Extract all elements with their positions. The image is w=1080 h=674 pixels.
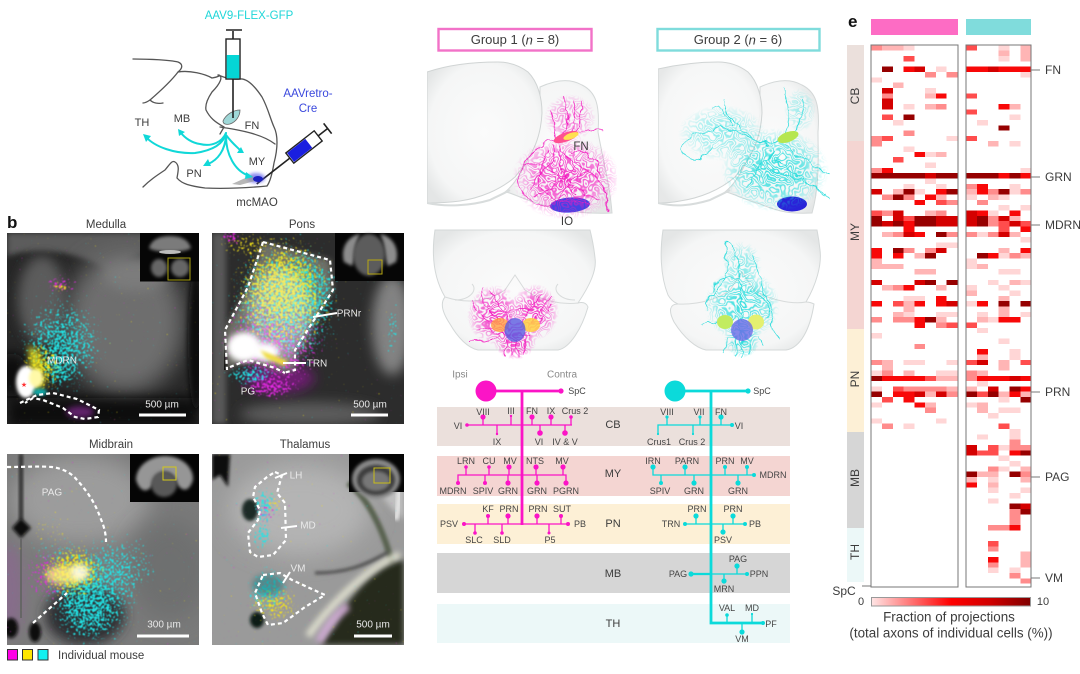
- panel: Thalamus micrograph: [212, 439, 404, 645]
- CB branches group 1: FN: [526, 406, 538, 416]
- panel c: group 1 heading: Group 1 (n = 8): [471, 32, 559, 47]
- heatmap callouts: VM: [1045, 571, 1063, 585]
- MY branches group 2: [645, 456, 786, 496]
- TH branches group 2: VM: [735, 634, 749, 644]
- CB branches group 1: [454, 406, 588, 447]
- region labels: PN: [186, 168, 202, 180]
- panel: Medulla micrograph: [0, 219, 204, 428]
- heatmap callouts: PRN: [1045, 385, 1070, 399]
- heatmap: group 2: [966, 45, 1031, 584]
- icon: mcMAO injection blob: [232, 173, 265, 185]
- colour bar caption: Fraction of projections: [883, 610, 1015, 624]
- heatmap callouts: PAG: [1045, 470, 1069, 484]
- band labels: MY: [605, 468, 622, 480]
- MB branches group 2: PAG: [729, 554, 747, 564]
- traces: [518, 98, 610, 212]
- colour bar: [858, 596, 1049, 608]
- glass shell: [661, 230, 820, 350]
- tracer tangle: [695, 235, 790, 360]
- region strip: CB: [848, 88, 862, 104]
- panel: Midbrain micrograph: [7, 439, 199, 645]
- heading: Thalamus: Thalamus: [280, 439, 330, 451]
- MY branches group 2: MDRN: [760, 470, 786, 480]
- MY branches group 1: MDRN: [440, 486, 466, 496]
- outline: dashed region: [20, 393, 99, 419]
- MY branches group 1: GRN: [527, 486, 547, 496]
- heatmap callouts: [832, 63, 1080, 598]
- PN branches group 2: PRN: [723, 504, 743, 514]
- PN branches group 2: PSV: [714, 535, 732, 545]
- PN branches group 1: SLD: [493, 535, 511, 545]
- PN branches group 1: SLC: [465, 535, 483, 545]
- heading: Midbrain: Midbrain: [89, 439, 133, 451]
- arrows: projections: [143, 129, 253, 179]
- MY branches group 1: MV: [555, 456, 569, 466]
- PN branches group 1: KF: [482, 504, 494, 514]
- CB branches group 2: VI: [735, 421, 743, 431]
- image: medulla section: [0, 233, 204, 428]
- scale bar: 500 µm: [354, 620, 392, 638]
- label: PAG: PAG: [42, 488, 62, 498]
- label: IO: IO: [561, 216, 573, 228]
- heatmap callouts: SpC: [832, 584, 856, 598]
- CB branches group 2: Crus 2: [679, 437, 705, 447]
- callout: MD: MD: [300, 520, 316, 532]
- colour bar: 0: [858, 596, 864, 608]
- region labels: mcMAO: [236, 197, 278, 209]
- heading: Pons: Pons: [289, 219, 315, 231]
- FN nucleus: [554, 130, 579, 144]
- scale bar: 500 µm: 500 µm: [353, 400, 387, 410]
- soma and trunk: [664, 380, 771, 623]
- side labels: Ipsi and Contra: Ipsi: [452, 370, 468, 380]
- label: AAVretro-Cre: Cre: [299, 103, 317, 115]
- MB branches group 2: MRN: [714, 584, 734, 594]
- IO nucleus: [550, 197, 590, 213]
- colour bar: 10: [1037, 596, 1049, 608]
- tracer tangle: [510, 94, 620, 220]
- MY branches group 1: NTS: [526, 456, 544, 466]
- callout: LH: LH: [290, 470, 302, 482]
- PN branches group 2: [662, 504, 761, 545]
- region strip: MB: [848, 469, 862, 487]
- region strip: TH: [848, 544, 862, 560]
- colour bar caption: [849, 610, 1053, 640]
- MY branches group 1: [440, 456, 579, 496]
- tracer tangle: [465, 283, 559, 361]
- CB branches group 1: Crus 2: [562, 406, 588, 416]
- label: AAVretro-Cre: [283, 88, 333, 115]
- CB branches group 2: [647, 407, 743, 447]
- PN branches group 1: PB: [574, 519, 586, 529]
- legend: individual mouse: Individual mouse: [58, 650, 144, 662]
- icon: FN injection site: [223, 110, 240, 124]
- label: AAVretro-Cre: AAVretro-: [283, 88, 333, 100]
- legend: individual mouse: [8, 650, 144, 662]
- panel label b: b: [7, 213, 17, 232]
- inset: coronal section: [130, 454, 199, 502]
- image: pons section: [212, 225, 412, 426]
- PN branches group 1: SUT: [553, 504, 572, 514]
- colour bar caption: (total axons of individual cells (%)): [849, 626, 1053, 640]
- inset: coronal section: [349, 454, 404, 499]
- PN branches group 1: PRN: [528, 504, 548, 514]
- MY branches group 2: MV: [740, 456, 754, 466]
- glass cerebrum: [427, 62, 542, 203]
- icon: blue syringe: [253, 123, 332, 189]
- TH branches group 2: MD: [745, 603, 759, 613]
- MY branches group 2: SPIV: [650, 486, 670, 496]
- TH branches group 2: [719, 603, 777, 644]
- soma and trunk: SpC: [753, 386, 771, 396]
- callout: VM: [283, 564, 306, 583]
- PN branches group 2: PB: [749, 519, 761, 529]
- traces: [700, 240, 780, 358]
- panel a: injection schematic: [133, 10, 333, 209]
- IO nuclei: [731, 319, 753, 341]
- glass shell: [433, 230, 595, 350]
- region labels: [135, 113, 278, 209]
- FN nuclei: [717, 314, 764, 330]
- label: PG: PG: [241, 386, 255, 398]
- callout: PRNr: [313, 308, 362, 320]
- image: midbrain section: [7, 454, 199, 645]
- CB branches group 1: VI: [535, 437, 543, 447]
- band labels: PN: [605, 518, 621, 530]
- region strip: MY: [848, 223, 862, 241]
- MY branches group 2: GRN: [728, 486, 748, 496]
- inset: coronal section: [335, 233, 404, 281]
- region labels: FN: [245, 120, 259, 132]
- PN branches group 1: PSV: [440, 519, 458, 529]
- panel: Pons micrograph: [212, 219, 412, 426]
- CB branches group 1: VIII: [476, 407, 490, 417]
- scale bar: 500 µm: [351, 400, 388, 416]
- callout: PRNr: PRNr: [337, 308, 362, 320]
- CB branches group 2: Crus1: [647, 437, 671, 447]
- outline: VM: [255, 573, 325, 625]
- CB branches group 2: FN: [715, 407, 727, 417]
- traces: [470, 288, 552, 358]
- PN branches group 1: P5: [544, 535, 556, 545]
- panel label e: e: [848, 12, 857, 31]
- outline: LH and MD: [248, 472, 286, 557]
- brain model: group 1 lateral view: [427, 62, 620, 220]
- brain model: group 2 lateral view: [658, 62, 835, 220]
- label: AAV9-FLEX-GFP: AAV9-FLEX-GFP: [205, 10, 294, 22]
- callout: LH: [275, 470, 302, 482]
- glass cerebrum: [658, 62, 762, 203]
- MY branches group 1: LRN: [457, 456, 475, 466]
- MY branches group 1: GRN: [498, 486, 518, 496]
- callout: TRN: TRN: [307, 358, 327, 370]
- MB branches group 2: PAG: [669, 569, 687, 579]
- heatmap callouts: FN: [1045, 63, 1061, 77]
- band labels: CB: [605, 419, 621, 431]
- side labels: Ipsi and Contra: Contra: [547, 370, 577, 380]
- heatmap callouts: MDRN: [1045, 218, 1080, 232]
- side labels: Ipsi and Contra: [452, 370, 577, 380]
- FN nucleus: [778, 131, 798, 143]
- region strip: PN: [848, 371, 862, 387]
- heatmap callouts: GRN: [1045, 170, 1072, 184]
- band labels: MB: [605, 568, 621, 580]
- PN branches group 2: TRN: [662, 519, 680, 529]
- band labels: TH: [606, 618, 620, 630]
- IO nuclei: [504, 318, 526, 342]
- TH branches group 2: VAL: [719, 603, 735, 613]
- MB branches group 2: [669, 554, 768, 594]
- PN branches group 1: [440, 504, 586, 545]
- PN branches group 2: PRN: [687, 504, 707, 514]
- brain outline: [133, 59, 277, 188]
- brain model: group 2 front view: [661, 230, 820, 360]
- CB branches group 2: VIII: [660, 407, 674, 417]
- dendrogram: group 2: [645, 380, 786, 644]
- brain model: group 1 front view: [433, 230, 595, 361]
- group colour bars: [871, 19, 1031, 35]
- CB branches group 1: IX: [493, 437, 501, 447]
- heading: Medulla: Medulla: [86, 219, 127, 231]
- callout: VM: VM: [290, 564, 306, 574]
- MB branches group 2: PPN: [750, 569, 768, 579]
- scale bar: 300 µm: [137, 620, 189, 638]
- TH branches group 2: PF: [765, 619, 777, 629]
- glass cerebellum and brainstem: [725, 81, 818, 213]
- tracer tangle: [680, 90, 828, 211]
- scale bar: 500 µm: [139, 400, 186, 416]
- region labels: MY: [249, 156, 266, 168]
- image: thalamus section: [212, 454, 404, 645]
- image: medulla section: ★: [21, 381, 27, 389]
- MY branches group 1: MV: [503, 456, 517, 466]
- glass cerebellum and brainstem: [505, 81, 612, 213]
- soma and trunk: [476, 380, 586, 525]
- CB branches group 1: VI: [454, 421, 462, 431]
- MY branches group 2: PARN: [675, 456, 699, 466]
- heatmap: group 1: [871, 45, 957, 429]
- label: MDRN: MDRN: [47, 356, 77, 366]
- region strip: [847, 45, 864, 582]
- heatmap frames: [871, 45, 1031, 587]
- CB branches group 1: III: [507, 406, 515, 416]
- CB branches group 2: VII: [693, 407, 705, 417]
- FN nuclei: [491, 318, 540, 332]
- MY branches group 2: GRN: [684, 486, 704, 496]
- traces: [681, 88, 830, 200]
- scale bar: 500 µm: 500 µm: [356, 620, 390, 630]
- label: FN group 1: FN: [573, 141, 589, 153]
- callout: TRN: [283, 358, 327, 370]
- MY branches group 2: PRN: [715, 456, 735, 466]
- IO nucleus: [777, 196, 807, 212]
- MY branches group 2: IRN: [645, 456, 661, 466]
- panel c: group 1 heading: [438, 29, 592, 50]
- MY branches group 1: SPIV: [473, 486, 493, 496]
- MY branches group 1: PGRN: [553, 486, 579, 496]
- region labels: TH: [135, 117, 149, 129]
- outline: PRNr and TRN: [225, 242, 333, 373]
- MY branches group 1: CU: [482, 456, 496, 466]
- panel c: group 2 heading: Group 2 (n = 6): [694, 32, 782, 47]
- callout: MD: [281, 520, 316, 532]
- scale bar: 300 µm: 300 µm: [147, 620, 181, 630]
- CB branches group 1: IV & V: [552, 437, 578, 447]
- dendrogram: group 1: [440, 380, 588, 545]
- CB branches group 1: IX: [547, 406, 555, 416]
- scale bar: 500 µm: 500 µm: [145, 400, 179, 410]
- bands: brain regions: [437, 407, 790, 643]
- band labels: [605, 419, 622, 630]
- soma and trunk: SpC: [568, 386, 586, 396]
- region labels: MB: [174, 113, 190, 125]
- icon: cyan syringe: [226, 30, 242, 118]
- PN branches group 1: PRN: [499, 504, 519, 514]
- inset: coronal section: [140, 233, 199, 282]
- outline: PAG boundary: [7, 467, 106, 623]
- panel c: group 2 heading: [658, 29, 820, 50]
